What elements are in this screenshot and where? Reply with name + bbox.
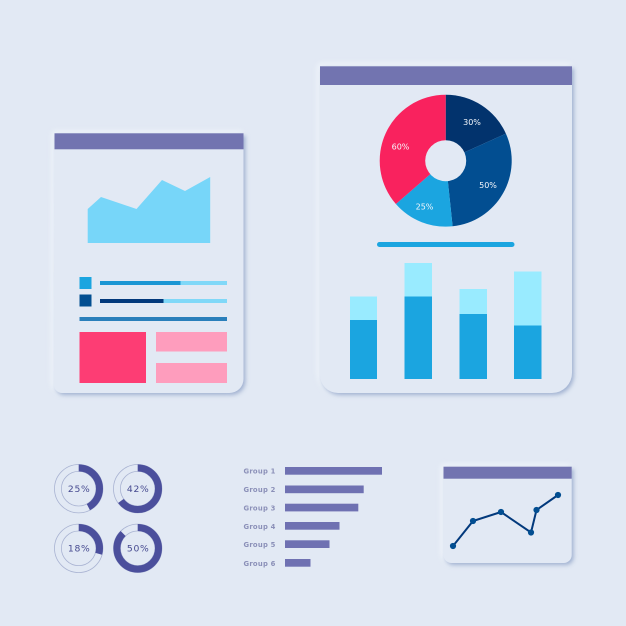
group labels: Group 5 <box>244 541 276 549</box>
horizontal bar chart: groups <box>244 467 382 568</box>
pie labels: 25% <box>416 202 434 212</box>
pie labels: 50% <box>479 181 497 190</box>
line card header bar <box>444 467 572 479</box>
gauge 25%: 25% <box>68 484 90 495</box>
panel: left report card <box>54 133 244 393</box>
pink block <box>80 332 146 383</box>
area chart <box>88 177 210 243</box>
group labels: Group 2 <box>244 486 276 494</box>
stacked bar chart <box>350 263 542 379</box>
group labels: Group 4 <box>244 523 276 531</box>
divider bar <box>80 317 227 321</box>
light pink block top <box>156 332 227 352</box>
left card header bar <box>54 133 244 149</box>
separator line <box>377 242 514 247</box>
light pink block bottom <box>156 363 227 383</box>
right card header bar <box>320 66 572 85</box>
line chart <box>450 492 561 549</box>
legend row 2 <box>80 294 227 306</box>
donut gauges <box>54 464 162 572</box>
legend row 1 <box>80 277 227 289</box>
group labels: Group 3 <box>244 504 276 512</box>
gauge 18%: 18% <box>68 544 90 555</box>
gauge 50%: 50% <box>127 544 149 555</box>
group labels: Group 1 <box>244 468 276 476</box>
donut pie chart <box>380 95 512 227</box>
panel: line chart card <box>444 467 572 563</box>
panel: right report card <box>320 66 572 393</box>
pie labels: 60% <box>392 142 410 152</box>
group labels: Group 6 <box>244 560 276 568</box>
group bars <box>285 467 382 567</box>
pie labels <box>392 118 497 212</box>
group labels <box>244 468 276 568</box>
pie labels: 30% <box>463 118 481 127</box>
gauge 42%: 42% <box>127 484 149 495</box>
